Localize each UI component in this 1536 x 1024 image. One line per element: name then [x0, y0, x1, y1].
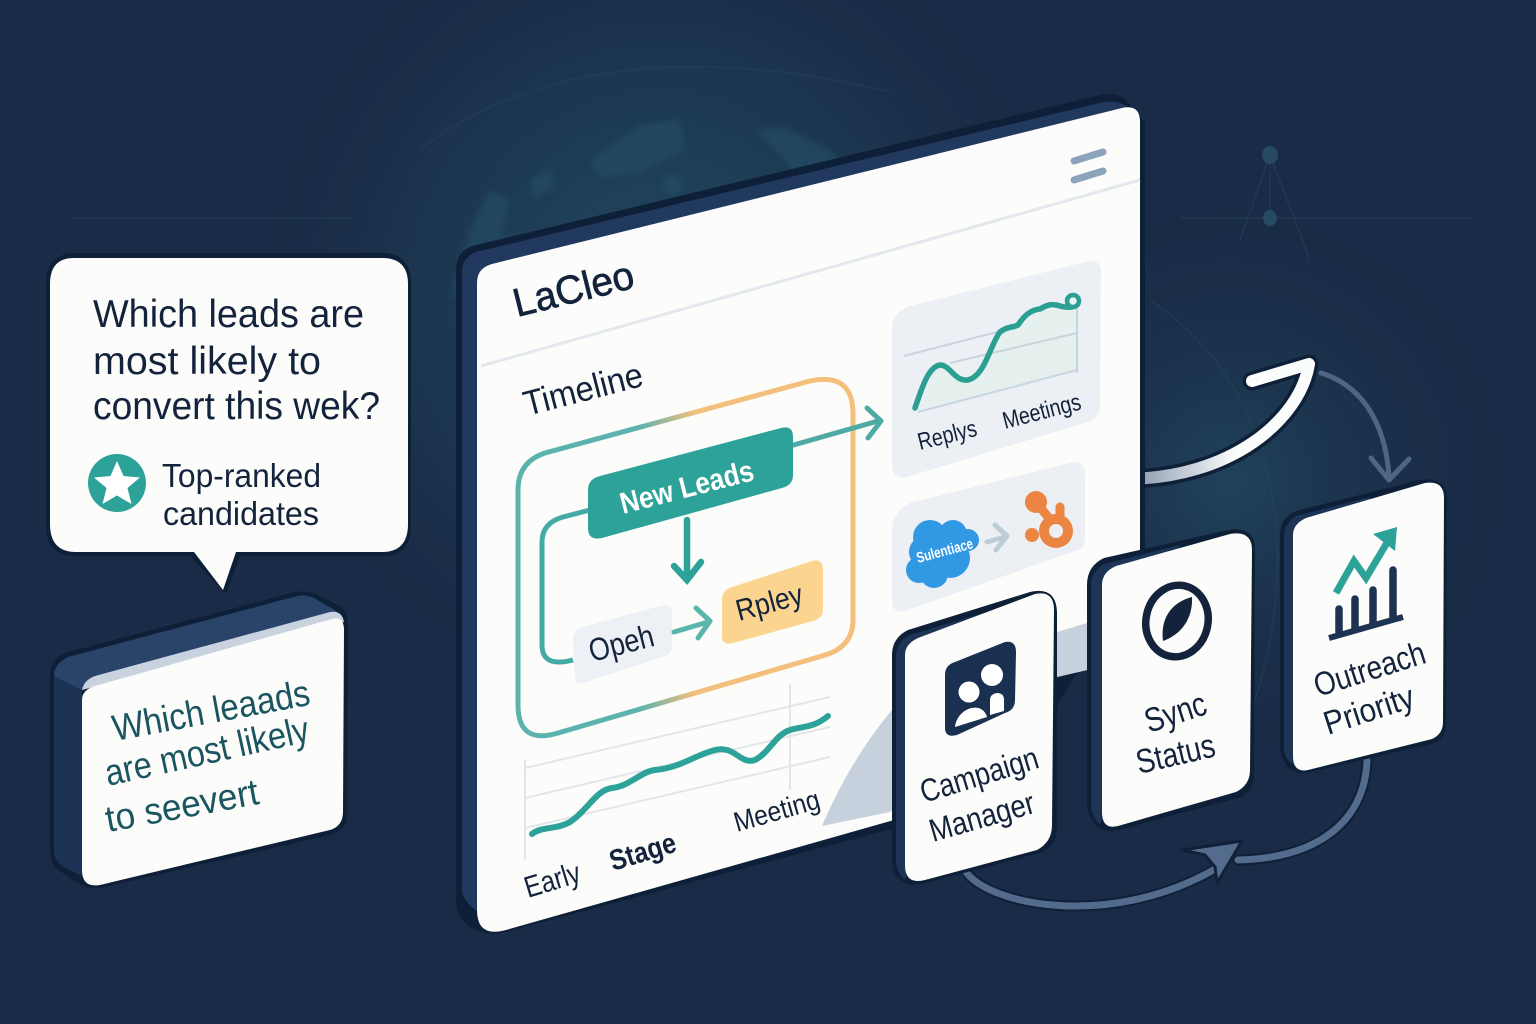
- rpley box: [722, 560, 823, 644]
- new leads box: [588, 427, 793, 539]
- card: sync status: Status: [1132, 727, 1219, 782]
- curved arrow to outreach: [1321, 373, 1409, 480]
- salesforce cloud: Sulentiace: [915, 535, 975, 567]
- menu icon: [1074, 152, 1103, 180]
- flow diagram: [518, 379, 881, 736]
- main dashboard panel: [456, 94, 1145, 934]
- card text: [101, 672, 313, 840]
- lower curved arrow: [966, 760, 1367, 906]
- opeh box: Opeh: [585, 617, 658, 669]
- card: campaign manager: Manager: [925, 784, 1039, 849]
- card text: to seevert: [102, 771, 263, 840]
- caption: Top-ranked: [162, 457, 321, 494]
- icon: star badge: [88, 454, 146, 512]
- icon: growth chart: [1329, 527, 1403, 638]
- label: Sync: [1140, 685, 1211, 741]
- label: Campaign: [916, 740, 1043, 810]
- card text: are most likely: [101, 709, 313, 794]
- question: convert this wek?: [93, 385, 380, 428]
- panel depth: [456, 94, 1145, 934]
- question: [93, 293, 380, 428]
- salesforce cloud: [906, 520, 979, 588]
- card text: Which leaads: [109, 672, 313, 749]
- panel face: [477, 107, 1140, 932]
- card: sync status: [1087, 529, 1255, 831]
- timeline label: Timeline: [519, 355, 647, 424]
- replies and meetings card: Replys: [915, 415, 980, 456]
- header divider: [481, 180, 1140, 366]
- chart labels: Early: [520, 856, 585, 905]
- integration arrow: [987, 525, 1007, 550]
- bottom chart: Meeting: [730, 784, 823, 838]
- arrow to chart: [790, 408, 881, 446]
- replies and meetings card: [892, 261, 1101, 477]
- label: Outreach: [1309, 634, 1430, 704]
- caption: [162, 457, 321, 532]
- opeh box: [573, 605, 672, 683]
- bottom chart: Stage: [606, 827, 680, 878]
- arrow down: [674, 520, 701, 580]
- bottom chart: [520, 684, 830, 905]
- question: Which leads are: [93, 293, 364, 336]
- tilted question card: [50, 592, 348, 888]
- arrow right: [674, 608, 710, 638]
- icon: people: [945, 642, 1016, 736]
- replies and meetings card: Meetings: [1000, 389, 1084, 435]
- top highlight: [82, 612, 344, 690]
- corner grey shape: [822, 623, 1087, 826]
- white swoosh arrow: [1125, 364, 1309, 479]
- question: most likely to: [93, 340, 321, 383]
- new leads box: New Leads: [616, 455, 757, 521]
- card: campaign manager: [892, 591, 1057, 885]
- inner loop: [542, 510, 590, 662]
- card: outreach priority: [1280, 479, 1447, 773]
- outer loop: [518, 379, 853, 736]
- card: outreach priority: Priority: [1319, 678, 1419, 742]
- rpley box: Rpley: [732, 578, 806, 628]
- hubspot mark: [1025, 491, 1068, 543]
- speech bubble: [46, 253, 411, 594]
- integrations card: [892, 462, 1085, 612]
- caption: candidates: [163, 495, 319, 532]
- brand name: LaCleo: [509, 253, 639, 326]
- icon: compass: [1139, 579, 1215, 663]
